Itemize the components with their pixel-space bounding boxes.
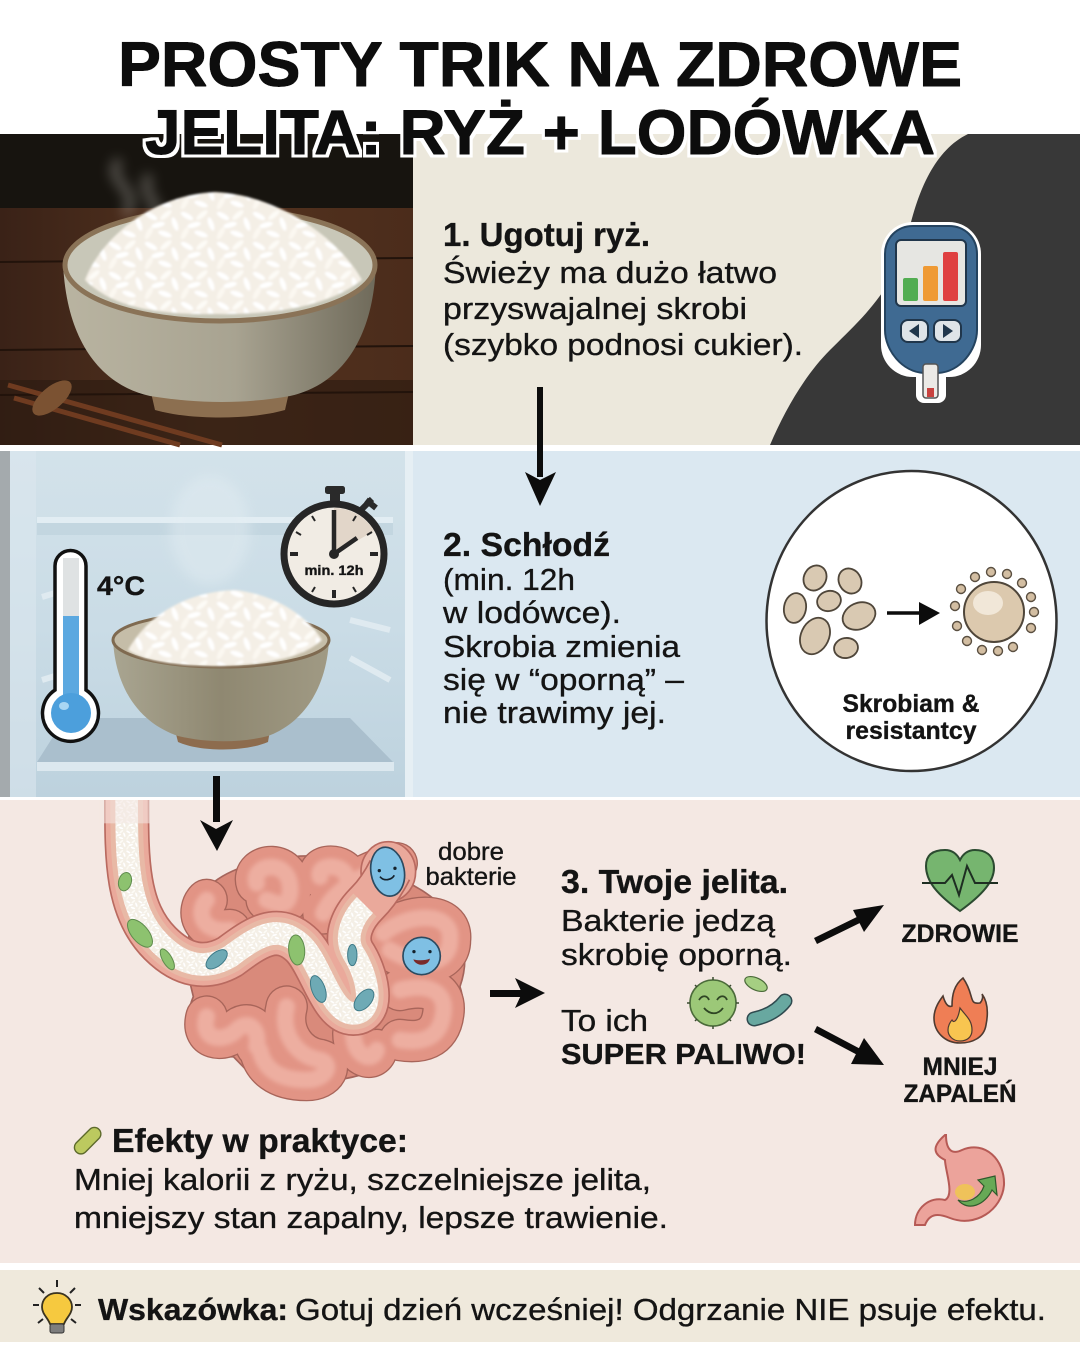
text block: step 1: (szybko podnosi cukier). (443, 327, 803, 362)
label: good bacteria: dobre (438, 838, 504, 866)
steam (115, 160, 156, 225)
text block: step 2: się w “oporną” – (443, 662, 685, 697)
text block: effects in practice: Efekty w praktyce: (112, 1122, 408, 1159)
label: less inflammation (904, 1053, 1016, 1108)
bacterium: laughing circle (403, 937, 440, 975)
text block: step 3: skrobię oporną. (561, 937, 792, 972)
icon: light bulb (33, 1280, 81, 1333)
label: temperature: 4°C (97, 571, 145, 601)
text block: step 3: To ich (561, 1003, 648, 1038)
diagram: starch transformation circle: resistantcy (846, 717, 977, 745)
text block: tip: Gotuj dzień wcześniej! Odgrzanie NIE psuje efektu. (295, 1292, 1046, 1327)
illustration: intestines with good bacteria (100, 800, 465, 1094)
text block: step 2: nie trawimy jej. (443, 695, 666, 730)
bowl foot (175, 730, 270, 750)
arrow (887, 611, 922, 615)
label: less inflammation: MNIEJ (922, 1053, 998, 1081)
title (118, 30, 962, 168)
bowl rim (113, 613, 329, 667)
upper shelf (37, 517, 393, 523)
text block: step 2: 2. Schłodź (443, 526, 610, 563)
panel: step 1 background (413, 134, 1080, 445)
icon: thermometer (43, 550, 99, 741)
rice mound (85, 192, 362, 314)
icon: heart with pulse (922, 850, 998, 911)
bowl body (113, 640, 329, 741)
title: JELITA: RYŻ + LODÓWKA (145, 98, 935, 168)
text block: step 3 (561, 863, 806, 1071)
icon: stopwatch (284, 486, 384, 604)
bowl rim (65, 209, 375, 321)
bacterium: smiling oval (367, 844, 408, 899)
fade at top of tube (100, 800, 157, 823)
label: good bacteria (426, 838, 516, 891)
panel: tip strip background (0, 1270, 1080, 1342)
rice in tube (127, 800, 367, 1013)
text block: step 3: Bakterie jedzą (561, 903, 776, 938)
text block: effects in practice: Mniej kalorii z ryżu, szczelniejsze jelita, (74, 1162, 651, 1197)
text block: step 2: Skrobia zmienia (443, 629, 681, 664)
starch granules (782, 561, 880, 660)
bacteria inside tube (116, 871, 306, 972)
icon: pill (72, 1125, 104, 1157)
bowl body (63, 262, 376, 402)
chopsticks (8, 385, 222, 445)
text block: effects in practice: mniejszy stan zapalny, lepsze trawienie. (74, 1200, 668, 1235)
photo: bowl of hot rice on a wooden table (0, 134, 413, 445)
text block: effects in practice (74, 1122, 668, 1235)
mass behind loops (188, 856, 465, 1094)
icon: stomach (915, 1135, 1004, 1225)
text block: step 3: 3. Twoje jelita. (561, 863, 788, 900)
icon: flame (934, 978, 987, 1043)
bowl foot (150, 388, 290, 418)
steam (170, 475, 250, 585)
label: health: ZDROWIE (902, 920, 1018, 948)
loop highlights (202, 863, 450, 1080)
tube inside (127, 800, 367, 1013)
arrow: step 1 to step 2 (525, 387, 556, 506)
title: PROSTY TRIK NA ZDROWE (118, 30, 962, 100)
text block: step 3: SUPER PALIWO! (561, 1039, 806, 1071)
text block: step 1: przyswajalnej skrobi (443, 291, 747, 326)
arrow: to health (814, 905, 884, 944)
icon: happy bacteria (687, 973, 785, 1029)
tube wall (127, 800, 390, 1013)
arrow: intestines to step 3 (490, 978, 545, 1008)
text block: step 1 (443, 216, 803, 362)
diagram: starch transformation circle: Skrobiam & (842, 690, 980, 718)
diagram: starch transformation circle (766, 471, 1056, 771)
glass shelf (37, 718, 393, 762)
label: good bacteria: bakterie (426, 863, 516, 891)
resistant starch ball (964, 582, 1024, 642)
loop flesh (202, 863, 450, 1080)
arrow: fridge to intestines (200, 776, 233, 851)
arrow: to less inflammation (814, 1026, 884, 1065)
label: less inflammation: ZAPALEŃ (904, 1079, 1016, 1108)
door ledges (42, 593, 390, 680)
dark corner shape (770, 134, 1080, 445)
panel: step 2 background (413, 451, 1080, 797)
icon: stopwatch: min. 12h (304, 562, 364, 578)
text block: step 1: Świeży ma dużo łatwo (443, 254, 777, 290)
text block: step 1: 1. Ugotuj ryż. (443, 216, 650, 253)
photo: rice bowl in a fridge (0, 451, 413, 797)
end bulb around smiling bacterium (361, 842, 416, 902)
text block: tip: Wskazówka: (98, 1292, 288, 1327)
text block: step 2 (442, 526, 685, 730)
text block: step 2: w lodówce). (442, 595, 621, 630)
loop outlines (202, 863, 450, 1080)
panel: step 3 background (0, 800, 1080, 1263)
icon: glucose meter (881, 222, 981, 403)
text block: step 2: (min. 12h (443, 562, 575, 597)
rice mound (128, 590, 322, 666)
